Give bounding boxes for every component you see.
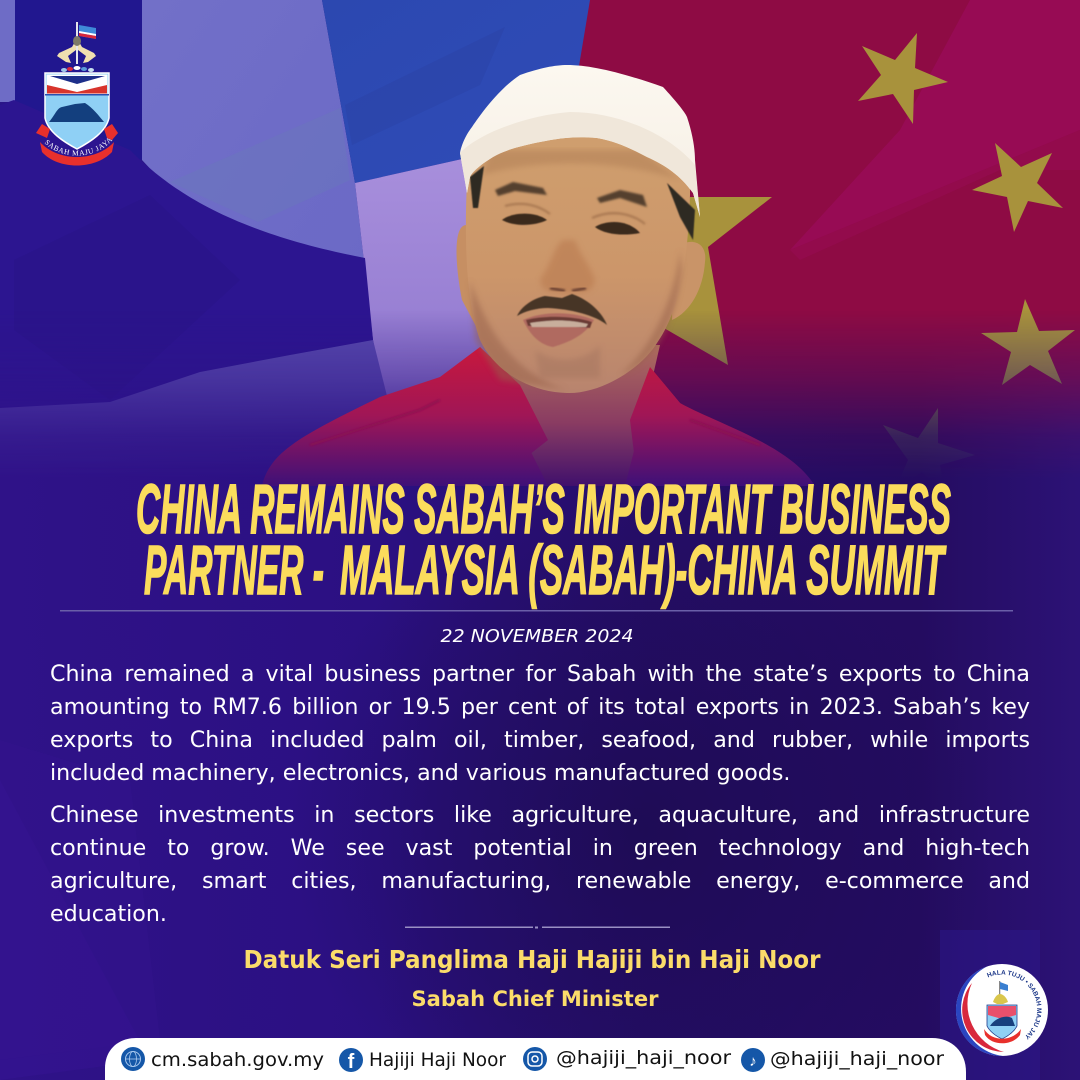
body text: paragraph 1: included machinery, electronics, and various manufactured goods. (50, 760, 790, 786)
icon: facebook: f (348, 1051, 355, 1073)
body text: paragraph 2 (50, 802, 1030, 927)
hair (470, 166, 695, 240)
mountain (49, 103, 104, 122)
body text: paragraph 2: agriculture, smart cities, manufacturing, renewable energy, e-commerce and (50, 868, 1030, 894)
signature name: Datuk Seri Panglima Haji Hajiji bin Haji Noor (244, 945, 821, 974)
red crescent (962, 983, 1004, 1052)
flagpole (76, 22, 78, 64)
tiktok handle: @hajiji_haji_noor (770, 1048, 944, 1070)
eyebrows (495, 182, 647, 207)
ornament divider (405, 926, 670, 928)
flag (79, 25, 96, 39)
flag: China flag (575, 0, 1080, 500)
logo: Sabah coat of arms (36, 22, 118, 166)
collar (440, 347, 548, 470)
body text: paragraph 1 (50, 661, 1030, 786)
badge disc (956, 964, 1048, 1056)
mouth (523, 313, 594, 347)
bottom fade (0, 310, 1080, 1080)
ears (456, 225, 480, 330)
icon: globe (121, 1047, 145, 1071)
icon: tiktok: ♪ (749, 1053, 757, 1070)
stars of China flag (650, 33, 1075, 495)
blue crescent (956, 966, 1003, 1056)
body text: paragraph 1: amounting to RM7.6 billion or 19.5 per cent of its total exports in 2023. Sabah’s key (50, 694, 1030, 720)
badge text: HALA TUJU • SABAH MAJU JAYA (986, 970, 1042, 1040)
body text: paragraph 2: Chinese investments in sectors like agriculture, aquaculture, and infrastructure (50, 802, 1030, 828)
flag and arms (999, 981, 1000, 1001)
beads (61, 66, 94, 72)
ribbon (36, 124, 118, 140)
body text: paragraph 1: China remained a vital business partner for Sabah with the state’s exports to China (50, 661, 1030, 687)
cap (460, 65, 700, 217)
eyes (502, 204, 645, 235)
title (136, 470, 951, 609)
ribbon (984, 1029, 1021, 1043)
shoulder seam (310, 400, 760, 445)
face shading (470, 250, 682, 390)
motto: SABAH MAJU JAYA (44, 138, 112, 156)
photo: man in white cap and red shirt (262, 65, 815, 486)
body text: paragraph 2: education. (50, 901, 167, 927)
footer: social bar (105, 1038, 966, 1080)
arms holding pole (57, 40, 96, 63)
title: PARTNER - (144, 531, 324, 609)
divider (60, 610, 1013, 612)
signature role: Sabah Chief Minister (412, 987, 659, 1011)
icon: instagram (523, 1047, 547, 1071)
moustache (517, 294, 607, 325)
shirt (262, 347, 815, 486)
nose (540, 240, 595, 294)
flag: Sabah flag folds (0, 0, 600, 480)
body text: paragraph 2: continue to grow. We see vast potential in green technology and high-tech (50, 835, 1030, 861)
face (466, 130, 690, 393)
icon: facebook (339, 1048, 363, 1073)
facebook name: Hajiji Haji Noor (369, 1049, 506, 1071)
shield (987, 1005, 1017, 1039)
instagram handle: @hajiji_haji_noor (556, 1047, 731, 1069)
website: cm.sabah.gov.my (151, 1049, 324, 1071)
shield (45, 73, 109, 149)
icon: tiktok (741, 1048, 765, 1072)
neck (486, 345, 660, 486)
date: 22 NOVEMBER 2024 (440, 626, 634, 647)
body text: paragraph 1: exports to China included palm oil, timber, seafood, and rubber, while imports (50, 727, 1030, 753)
bar (105, 1038, 966, 1080)
